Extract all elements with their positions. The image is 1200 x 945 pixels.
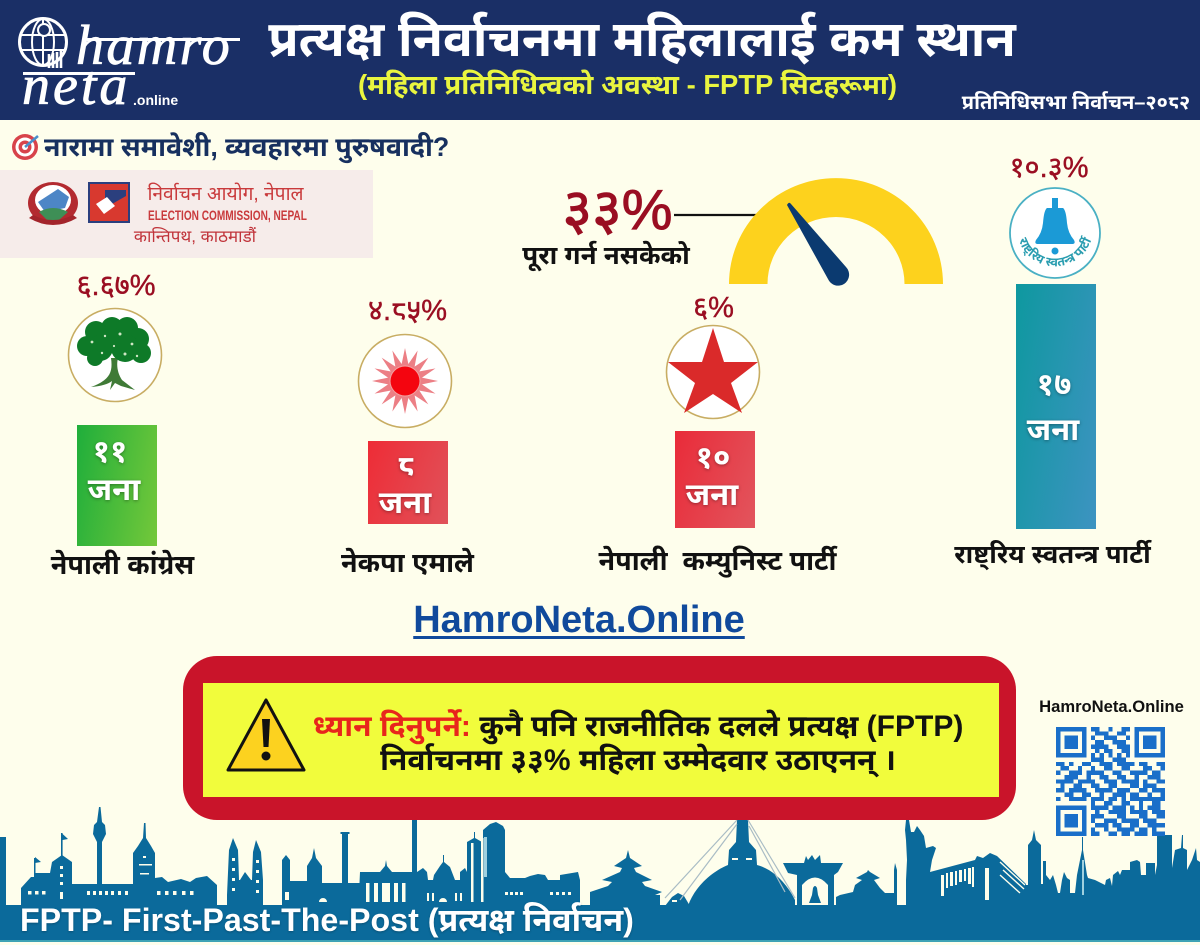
website link: HamroNeta.Online [413,599,745,641]
count: १० [696,440,730,475]
commission name nepali: निर्वाचन आयोग, नेपाल [147,184,304,205]
icon: bell: राष्ट्रिय स्वतन्त्र पार्टी [1020,235,1091,266]
logo: hamro neta [18,15,240,117]
gauge: 33 percent [522,178,943,286]
footer definition: FPTP- First-Past-The-Post (प्रत्यक्ष निर्वाचन) [20,902,634,938]
bar: 11 [77,425,157,546]
icon: sun [358,334,452,428]
icon: star [666,324,760,420]
icon: target [12,134,39,160]
icon: ballot box [88,182,130,223]
callout: warning [183,656,1016,820]
qr label: HamroNeta.Online [1039,697,1184,716]
subtitle: (महिला प्रतिनिधित्वको अवस्था - FPTP सिटहरूमा) [358,69,897,100]
callout text: ध्यान दिनुपर्ने: कुनै पनि राजनीतिक दलले प्रत्यक्ष (FPTP) निर्वाचनमा ३३% महिला उम्मेदवार उठाएनन् । [313,710,963,777]
icon: globe [18,17,68,68]
party: nepali communist party [598,292,838,578]
stupa strings and inner details [484,820,1084,903]
gauge chart [674,178,943,286]
panel: election commission [0,170,373,258]
logo bar: neta [23,72,135,74]
percent: ४.८५% [368,295,447,327]
percent: ६.६७% [76,270,156,302]
big number: ३३% [563,178,672,242]
unit: जना [686,477,738,512]
icon: bell [1009,187,1101,279]
title: प्रत्यक्ष निर्वाचनमा महिलालाई कम स्थान [268,12,1016,67]
bar: 10 [675,431,755,528]
party name: नेपाली कांग्रेस [51,550,194,580]
count: ८ [397,448,415,483]
party: rastriya swatantra party [954,152,1152,570]
count: १७ [1037,367,1071,402]
bar: 17 [1016,284,1096,529]
callout yellow panel [203,683,999,797]
bar: 8 [368,441,448,524]
icon: tree [68,308,162,402]
commission name english: ELECTION COMMISSION, NEPAL [148,207,307,223]
logo suffix: .online: .online [133,92,178,108]
logo bar: hamro [87,38,240,40]
election tag: प्रतिनिधिसभा निर्वाचन–२०८२ [962,92,1190,114]
icon: warning triangle [226,698,306,772]
percent: ६% [693,292,734,324]
percent: १०.३% [1009,152,1089,184]
logo word: neta: neta [22,55,130,117]
party name: नेपाली कम्युनिस्ट पार्टी [598,546,836,576]
party: nepali congress [50,270,195,580]
unit: जना [1027,412,1079,447]
party name: नेकपा एमाले [341,548,474,578]
logo word: hamro: hamro [76,15,232,77]
unit: जना [379,485,431,520]
party name: राष्ट्रिय स्वतन्त्र पार्टी [954,541,1151,569]
commission address: कान्तिपथ, काठमाडौं [134,227,256,246]
count: ११ [93,434,127,469]
qr code [1056,727,1165,836]
icon: nepal emblem [28,182,78,225]
unit: जना [88,472,140,507]
party: nekapa emale [341,295,474,578]
gauge caption: पूरा गर्न नसकेको [522,240,690,270]
section heading: नारामा समावेशी, व्यवहारमा पुरुषवादी? [44,132,449,162]
header banner [0,0,1200,120]
